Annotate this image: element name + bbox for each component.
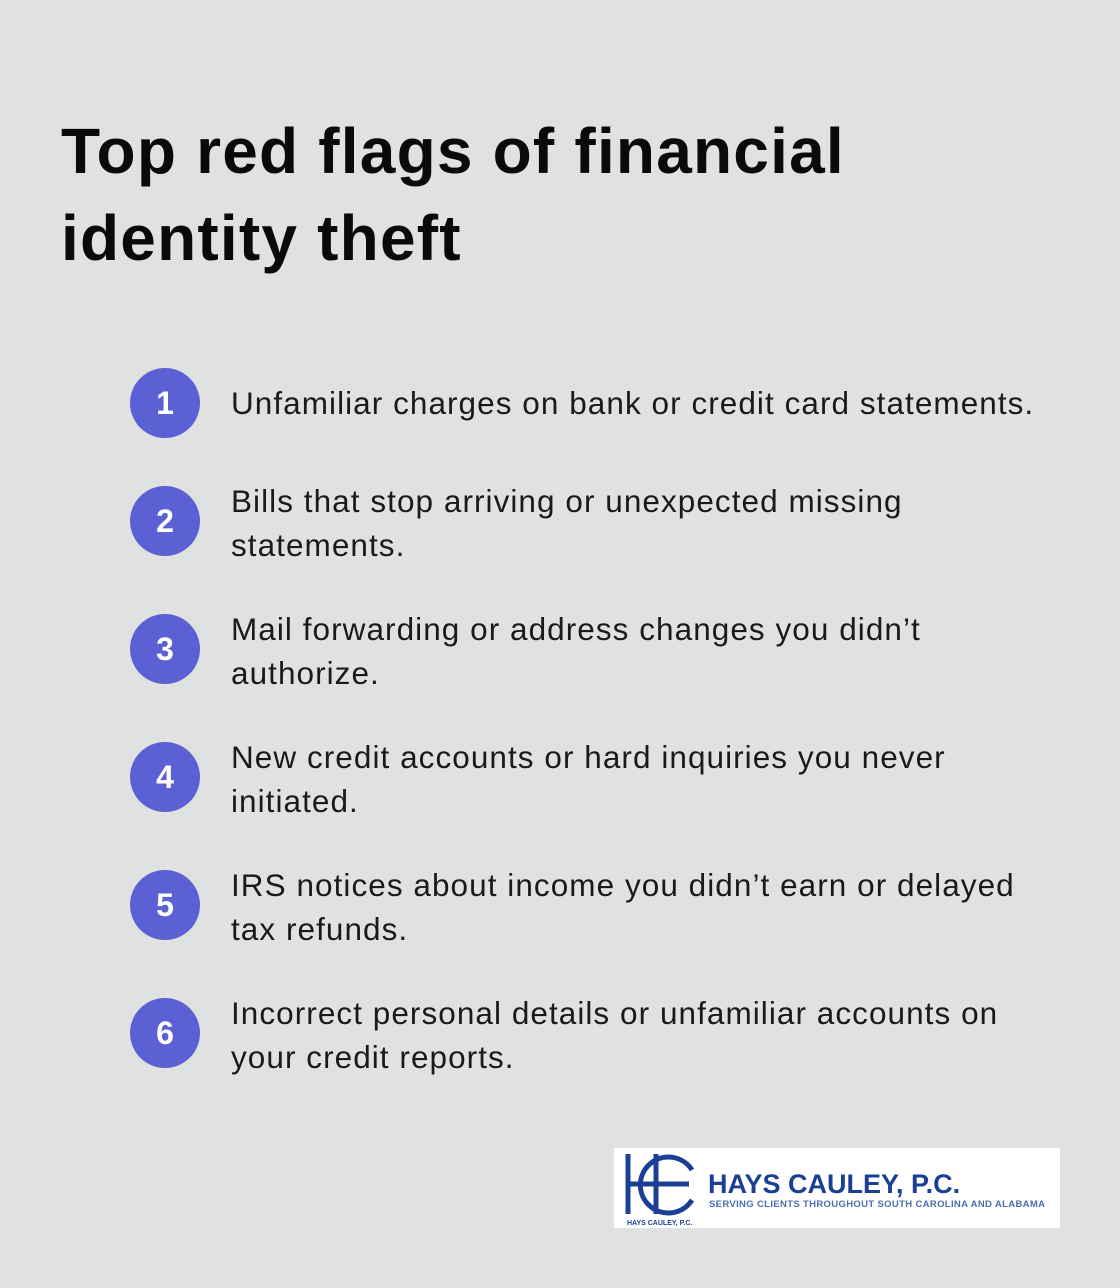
item 4: New credit accounts or hard inquiries you never bbox=[231, 739, 946, 775]
item 3: authorize. bbox=[231, 655, 380, 691]
item 1 bbox=[130, 368, 1034, 438]
logo: HAYS CAULEY, P.C. bbox=[627, 1220, 692, 1227]
item 2: 2 bbox=[156, 503, 174, 539]
item 3 bbox=[130, 611, 921, 691]
item 2 bbox=[130, 483, 903, 563]
item 6: your credit reports. bbox=[231, 1039, 515, 1075]
item 4: initiated. bbox=[231, 783, 359, 819]
item 2: statements. bbox=[231, 527, 405, 563]
item 6 bbox=[130, 995, 998, 1075]
item 2: Bills that stop arriving or unexpected missing bbox=[231, 483, 903, 519]
logo: HAYS CAULEY, P.C. bbox=[708, 1169, 960, 1199]
logo: SERVING CLIENTS THROUGHOUT SOUTH CAROLINA AND ALABAMA bbox=[709, 1199, 1045, 1210]
title: Top red flags of financial bbox=[61, 115, 845, 187]
item 1: 1 bbox=[156, 385, 174, 421]
item 6: Incorrect personal details or unfamiliar accounts on bbox=[231, 995, 998, 1031]
item 5: IRS notices about income you didn’t earn or delayed bbox=[231, 867, 1015, 903]
item 5: 5 bbox=[156, 887, 174, 923]
item 3: Mail forwarding or address changes you didn’t bbox=[231, 611, 921, 647]
item 5: tax refunds. bbox=[231, 911, 408, 947]
item 4: 4 bbox=[156, 759, 174, 795]
item 4 bbox=[130, 739, 946, 819]
item 5 bbox=[130, 867, 1015, 947]
title bbox=[61, 115, 845, 274]
item 1: Unfamiliar charges on bank or credit card statements. bbox=[231, 385, 1034, 421]
logo bbox=[614, 1148, 1060, 1228]
item 6: 6 bbox=[156, 1015, 174, 1051]
item 3: 3 bbox=[156, 631, 174, 667]
title: identity theft bbox=[61, 202, 462, 274]
